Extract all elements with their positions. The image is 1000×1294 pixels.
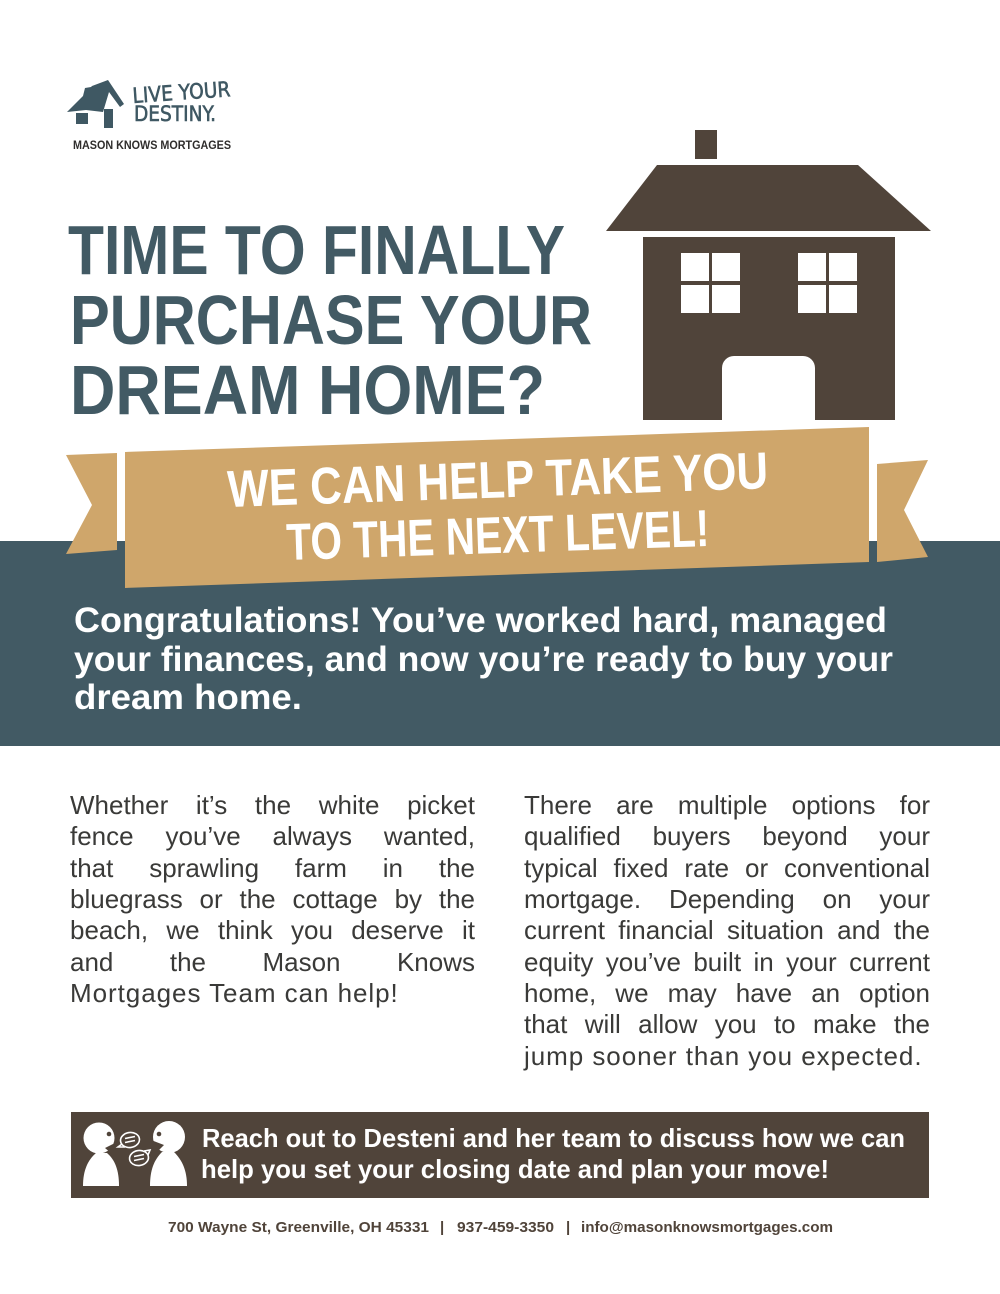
left body text: beach, we think you deserve it	[70, 915, 475, 945]
left body text: Whether it’s the white picket	[70, 790, 475, 820]
footer contact line: |	[566, 1219, 570, 1236]
ribbon banner	[66, 427, 928, 588]
right body text: qualified buyers beyond your	[524, 821, 930, 851]
right body text: mortgage. Depending on your	[524, 884, 930, 914]
left body text: bluegrass or the cottage by the	[70, 884, 475, 914]
congratulations text: Congratulations! You’ve worked hard, managed	[74, 601, 887, 640]
call to action text	[201, 1123, 905, 1184]
icon: two people talking	[83, 1121, 187, 1186]
footer contact line	[168, 1219, 833, 1236]
icon: large brown house	[606, 130, 931, 420]
title: DREAM HOME?	[70, 351, 545, 429]
title	[68, 211, 592, 429]
right body text	[523, 790, 930, 1071]
banner headline: TO THE NEXT LEVEL!	[285, 500, 710, 572]
logo	[67, 77, 231, 128]
icon: logo house	[67, 80, 124, 128]
logo company name: MASON KNOWS MORTGAGES	[73, 138, 231, 152]
left body text	[70, 790, 475, 1008]
dark teal band	[0, 541, 1000, 746]
left body text: and the Mason Knows	[70, 947, 475, 977]
call to action box	[71, 1112, 929, 1198]
congratulations text: your finances, and now you’re ready to buy your	[74, 640, 893, 679]
congratulations text: dream home.	[74, 678, 302, 717]
right body text: typical fixed rate or conventional	[524, 853, 930, 883]
left body text: that sprawling farm in the	[70, 853, 475, 883]
call to action text: Reach out to Desteni and her team to discuss how we can	[202, 1123, 905, 1153]
congratulations text	[74, 601, 893, 717]
footer contact line: |	[440, 1219, 444, 1236]
right body text: current financial situation and the	[524, 915, 930, 945]
right body text: jump sooner than you expected.	[524, 1041, 923, 1071]
left body text: fence you’ve always wanted,	[70, 821, 475, 851]
right body text: There are multiple options for	[524, 790, 930, 820]
footer contact line: 937-459-3350	[457, 1219, 554, 1236]
right body text: equity you’ve built in your current	[524, 947, 930, 977]
footer contact line: 700 Wayne St, Greenville, OH 45331	[168, 1219, 429, 1236]
right body text: that will allow you to make the	[524, 1009, 930, 1039]
banner headline: WE CAN HELP TAKE YOU	[226, 442, 769, 519]
call to action text: help you set your closing date and plan your move!	[201, 1154, 829, 1184]
footer contact line: info@masonknowsmortgages.com	[581, 1219, 833, 1236]
banner headline	[226, 442, 769, 572]
left body text: Mortgages Team can help!	[70, 978, 399, 1008]
logo tagline: DESTINY.	[134, 102, 216, 126]
logo tagline	[132, 77, 231, 126]
right body text: home, we may have an option	[524, 978, 930, 1008]
